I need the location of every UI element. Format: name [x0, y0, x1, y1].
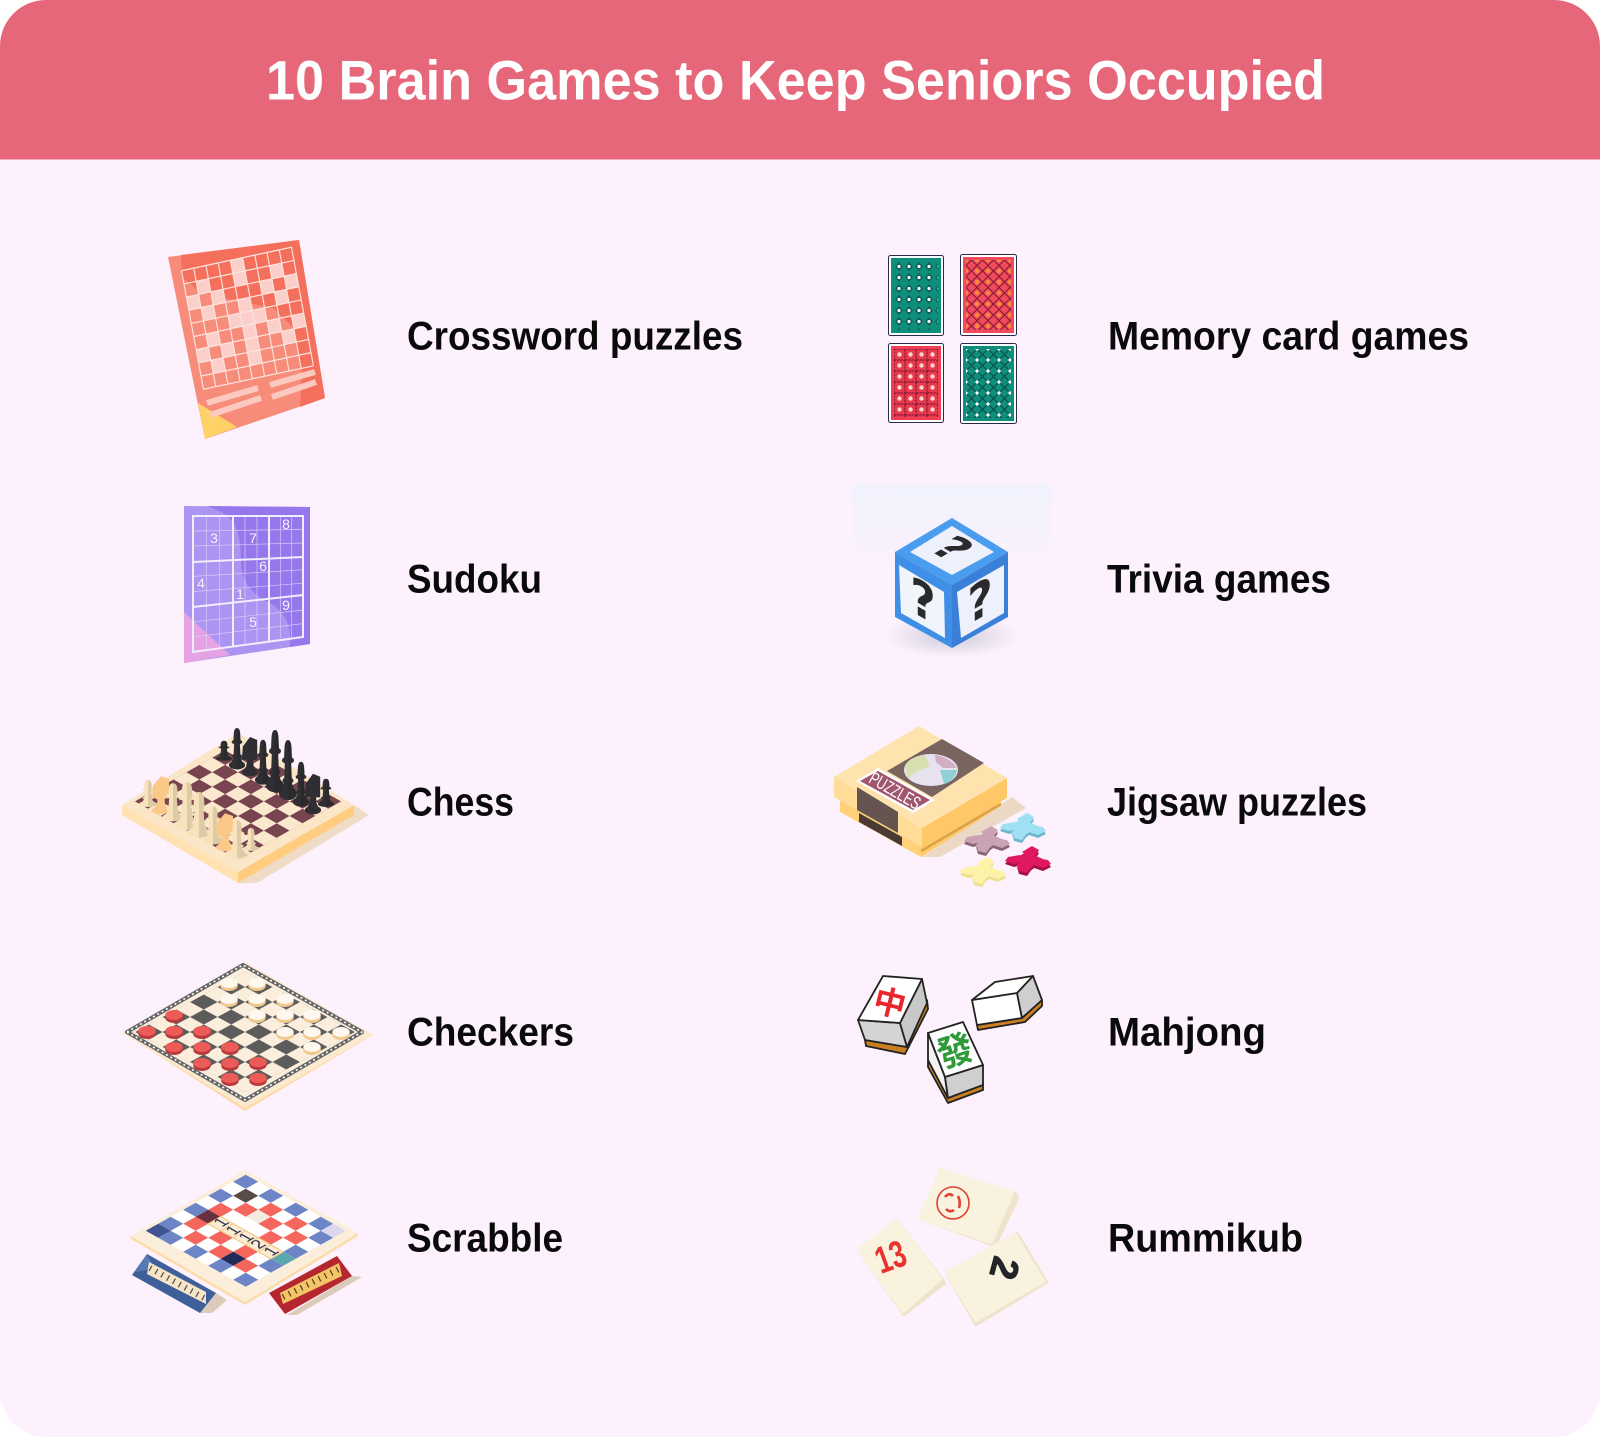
title: 10 Brain Games to Keep Seniors Occupied [266, 48, 1325, 112]
header band [0, 0, 1600, 160]
icon: scrabble board and racks: 2 [246, 1237, 271, 1251]
icon: scrabble board and racks: 1 [259, 1244, 284, 1258]
panel: chess [122, 728, 514, 883]
icon: rummikub tiles: 13 [870, 1233, 912, 1283]
icon: mahjong tiles: 中 [870, 982, 910, 1025]
icon: memory cards [888, 254, 1016, 424]
icon: question cube: ? [910, 565, 936, 637]
icon: rummikub tiles: 2 [981, 1252, 1027, 1284]
icon: scrabble board and racks [131, 1170, 362, 1315]
icon: sudoku grid: 9 [282, 597, 290, 613]
icon: scrabble board and racks: 1 [234, 1230, 259, 1244]
label: checkers: Checkers [407, 1010, 574, 1054]
label: memory card games: Memory card games [1108, 314, 1469, 358]
label: mahjong: Mahjong [1108, 1010, 1266, 1054]
icon: question cube [852, 484, 1052, 658]
label: chess: Chess [407, 780, 514, 824]
icon: sudoku grid: 6 [259, 558, 267, 574]
icon: sudoku grid: 5 [249, 614, 257, 630]
label: sudoku: Sudoku [407, 558, 542, 602]
icon: question cube: ? [967, 565, 993, 637]
icon: sudoku grid: 3 [210, 530, 218, 546]
label: rummikub: Rummikub [1108, 1216, 1303, 1260]
panel: rummikub [859, 1170, 1303, 1324]
icon: question cube: ? [918, 530, 985, 568]
icon: mahjong tiles [858, 976, 1042, 1103]
icon: sudoku grid: 7 [249, 530, 257, 546]
icon: rummikub tiles [859, 1170, 1046, 1324]
icon: sudoku grid: 4 [197, 575, 205, 591]
panel: scrabble [131, 1170, 563, 1315]
icon: scrabble board and racks: 1 [209, 1215, 234, 1229]
label: scrabble: Scrabble [407, 1216, 563, 1260]
icon: sudoku grid: 1 [236, 586, 244, 602]
label: trivia games: Trivia games [1107, 558, 1331, 602]
label: crossword puzzles: Crossword puzzles [407, 314, 743, 358]
icon: puzzle box and pieces: PUZZLES [866, 768, 924, 813]
icon: scrabble board and racks: 1 [221, 1223, 246, 1237]
icon: sudoku grid [184, 506, 310, 663]
panel: jigsaw puzzles [834, 726, 1367, 887]
icon: sudoku grid: 8 [282, 516, 290, 532]
icon: puzzle box and pieces [834, 726, 1051, 887]
panel: trivia games [852, 484, 1331, 658]
icon: crossword [168, 240, 325, 439]
panel: checkers [123, 962, 574, 1111]
icon: chess board and pieces [122, 728, 369, 883]
panel: crossword puzzles [168, 240, 743, 439]
panel: sudoku [184, 506, 542, 663]
panel: mahjong [858, 976, 1266, 1103]
icon: mahjong tiles: 發 [932, 1026, 979, 1076]
icon: checkers board [123, 962, 373, 1111]
panel: memory card games [888, 254, 1469, 424]
label: jigsaw puzzles: Jigsaw puzzles [1107, 780, 1367, 824]
